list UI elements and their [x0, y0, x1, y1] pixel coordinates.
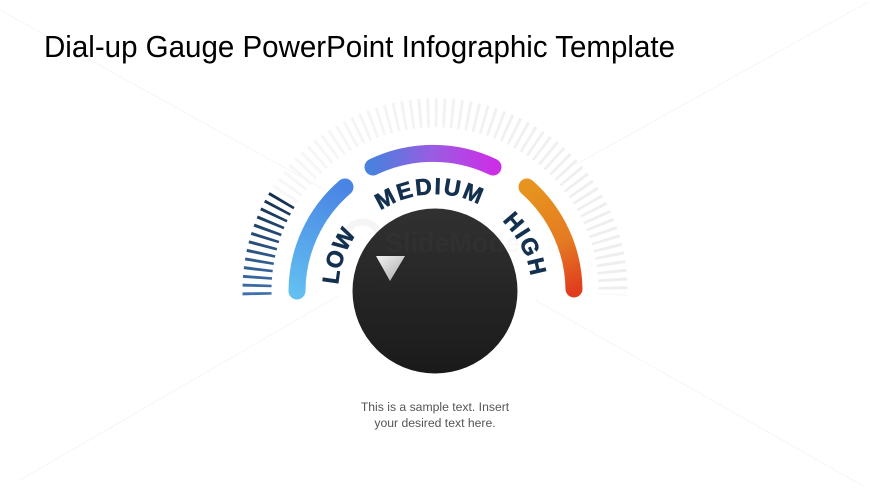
label: low: LOW — [322, 226, 354, 284]
dial pointer — [376, 256, 405, 281]
dial knob — [352, 208, 518, 374]
watermark: SlideModel — [385, 228, 528, 258]
title: Dial-up Gauge PowerPoint Infographic Template — [44, 29, 675, 64]
caption: your desired text here. — [374, 416, 496, 430]
label: medium: MEDIUM — [374, 178, 484, 210]
label: high: HIGH — [502, 210, 546, 275]
high arc — [527, 187, 574, 289]
watermark logo — [345, 222, 378, 246]
grey ticks — [257, 113, 613, 295]
low range dark ticks — [242, 192, 295, 296]
medium arc — [373, 153, 493, 167]
caption: This is a sample text. Insert — [361, 400, 510, 414]
low arc — [297, 187, 345, 291]
gauge tick scale — [257, 113, 613, 295]
